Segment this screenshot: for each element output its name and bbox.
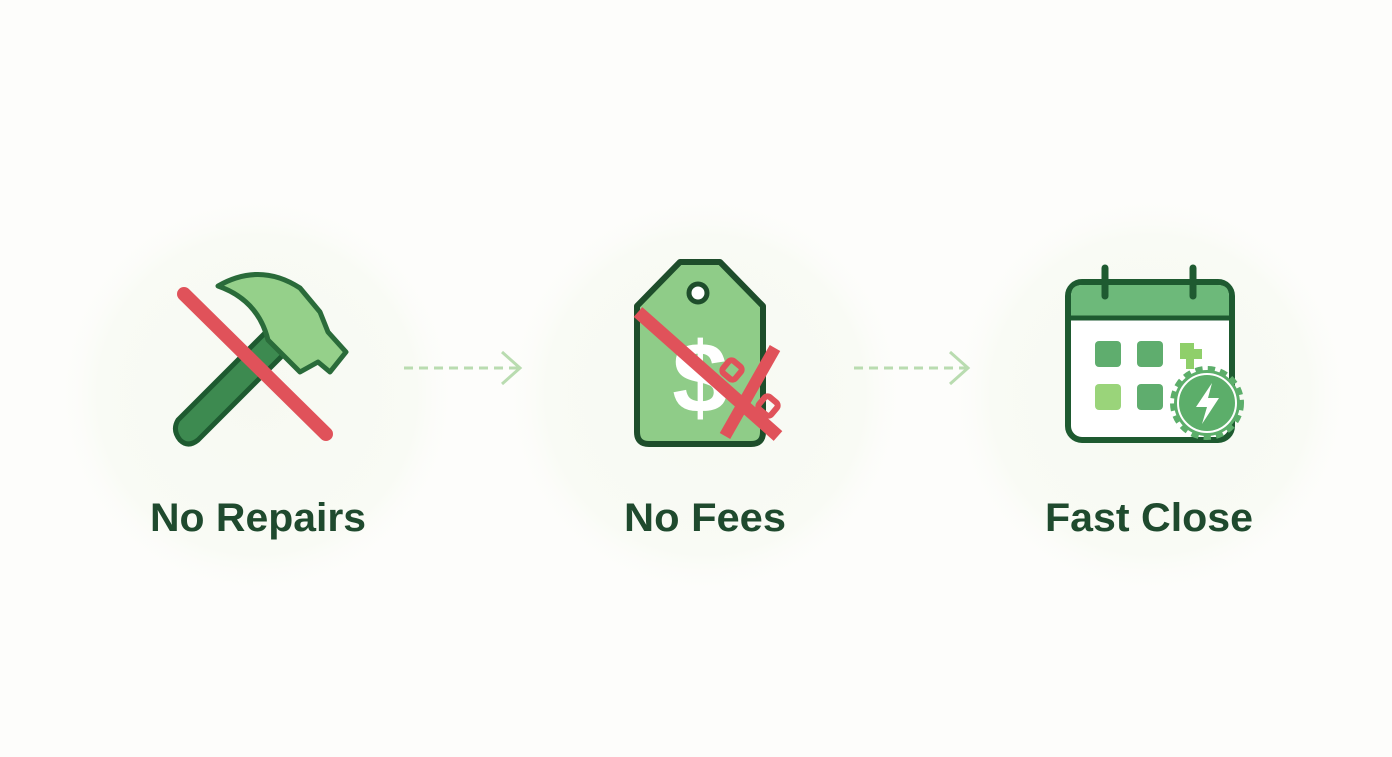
label: Fast Close: Fast Close bbox=[1045, 496, 1253, 540]
label: No Fees: No Fees bbox=[624, 496, 786, 540]
icon: calendar with fast gear bbox=[1068, 268, 1240, 440]
icon: price tag crossed out: $ bbox=[672, 322, 728, 434]
icon: price tag crossed out bbox=[637, 262, 779, 444]
label: No Repairs: No Repairs bbox=[150, 496, 366, 540]
icon: hammer crossed out bbox=[175, 274, 346, 444]
arrow 1 bbox=[404, 352, 520, 384]
arrow 2 bbox=[854, 352, 968, 384]
